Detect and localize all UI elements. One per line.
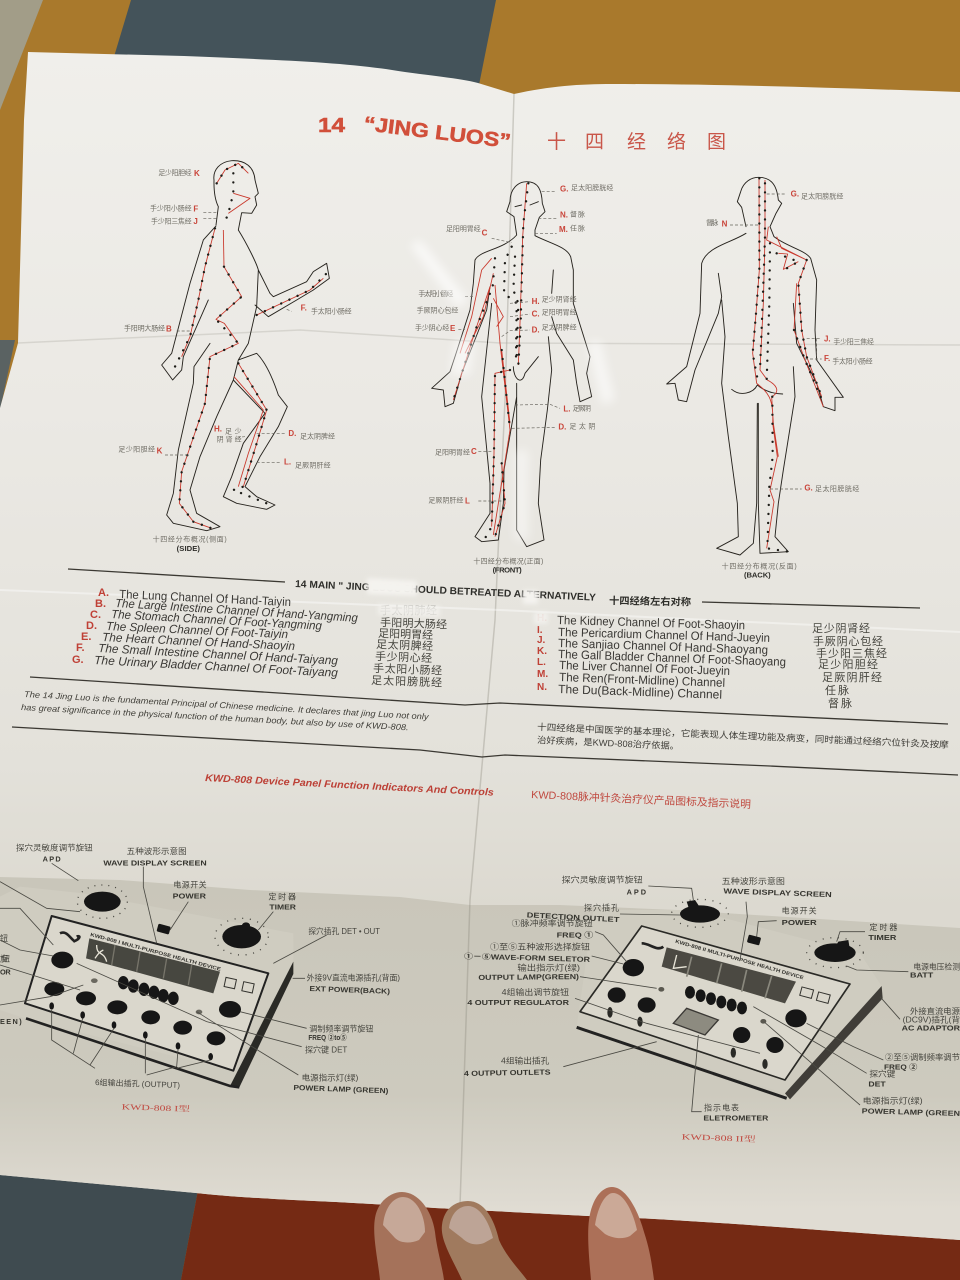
labels: side: F — [193, 205, 198, 214]
labels: back: F. — [824, 354, 830, 363]
device II labels: 4组输出插孔 — [501, 1055, 549, 1065]
body outline: back — [667, 177, 843, 555]
labels: front: 足阳明胃经 — [446, 224, 481, 233]
channel list left: E. — [81, 631, 91, 643]
device I labels: 6组输出插孔 (OUTPUT) — [95, 1077, 181, 1090]
title: “JING LUOS” — [362, 113, 512, 153]
device II labels: ②至⑤调制频率调节 — [885, 1052, 960, 1062]
device I labels: EXT POWER(BACK) — [309, 984, 391, 996]
figure: side view — [118, 161, 352, 553]
channels: front — [453, 183, 527, 537]
channel list left: A. — [98, 587, 109, 599]
device I caption: KWD-808 I型 — [122, 1101, 190, 1114]
device II labels: 4 OUTPUT OUTLETS — [464, 1067, 551, 1078]
device II labels: FREQ ① — [557, 930, 594, 939]
channel list left — [72, 587, 359, 680]
channel list right: J. — [537, 635, 546, 646]
labels: side — [118, 168, 352, 553]
labels: side: F. — [301, 304, 307, 313]
english description: The 14 Jing Luo is the fundamental Principal of Chinese medicine. It declares that jing Luo not only — [24, 689, 430, 722]
heading rule and channel list heading: 十四经络左右对称 — [609, 594, 691, 608]
device I body: KWD-808 I MULTI-PURPOSE HEALTH DEVICE — [89, 932, 222, 973]
channel list left chinese: 手阳明大肠经 — [380, 615, 447, 631]
device I labels: TIMER — [269, 902, 297, 911]
section heading chinese: KWD-808脉冲针灸治疗仪产品图标及指示说明 — [531, 788, 751, 811]
channel list left: The Small Intestine Channel Of Hand-Taiyang — [98, 641, 339, 668]
labels: front: C. — [532, 310, 540, 319]
device II labels: POWER — [782, 918, 818, 927]
title: 14 — [318, 115, 346, 137]
labels: front: N. — [560, 211, 568, 220]
labels: side: (SIDE) — [177, 544, 200, 553]
labels: front: C — [471, 447, 477, 456]
channels: side — [179, 163, 323, 528]
labels: side: 足少阳胆经 — [118, 445, 155, 454]
device I labels — [0, 843, 400, 1095]
device II labels: DETECTION OUTLET — [527, 910, 620, 924]
channel list left: The Stomach Channel Of Foot-Yangming — [111, 607, 323, 633]
body details: back — [732, 385, 783, 394]
channel list left: The Lung Channel Of Hand-Taiyin — [119, 587, 291, 609]
channel list right: H. — [537, 613, 547, 624]
labels: back: 足太阳膀胱经 — [815, 484, 859, 493]
labels: front: D. — [532, 325, 540, 334]
labels: front: G. — [560, 185, 568, 194]
labels: front: L. — [563, 405, 570, 414]
device II labels: 电源电压检测 — [913, 961, 960, 971]
body outline: front — [432, 182, 592, 547]
english description — [21, 689, 430, 732]
labels: back: J. — [824, 335, 831, 344]
device II labels: 外接直流电源 — [910, 1006, 960, 1016]
channel list right: The Du(Back-Midline) Channel — [558, 682, 722, 702]
labels: front: 手少阴心经 — [415, 323, 449, 332]
labels: front: 任脉 — [570, 224, 585, 233]
device II labels: BATT — [910, 970, 934, 979]
labels: back: G. — [804, 484, 813, 493]
chinese description: 治好疾病，是KWD-808治疗依据。 — [537, 734, 679, 751]
channel list right: The Sanjiao Channel Of Hand-Shaoyang — [558, 636, 768, 657]
labels: back: 足太阳膀胱经 — [801, 191, 843, 200]
labels: front: 足厥阴 — [573, 404, 591, 413]
fingernail right — [595, 1193, 637, 1238]
device I labels: APD — [43, 854, 61, 863]
labels: back: 督脉 — [706, 218, 718, 227]
device II labels: 探穴插孔 — [584, 903, 619, 913]
device II labels: 4组输出调节旋钮 — [502, 987, 569, 997]
channel list right: M. — [537, 669, 548, 680]
channel list right: The Pericardium Channel Of Hand-Jueyin — [558, 625, 770, 645]
labels: back: 手少阳三焦经 — [833, 337, 874, 346]
labels: side: B — [166, 325, 172, 334]
channel list right chinese: 手少阳三焦经 — [816, 646, 887, 660]
labels: front: 十四经分布概况(正面) — [473, 556, 543, 565]
channel list left chinese — [371, 603, 447, 689]
channel list right: K. — [537, 646, 547, 657]
channel list left: The Urinary Bladder Channel Of Foot-Taiyang — [94, 653, 339, 680]
device II labels: 探穴灵敏度调节旋钮 — [562, 874, 643, 884]
labels: front: 足太阴 — [569, 421, 595, 430]
channel list right — [537, 613, 786, 702]
device I labels: 五种波形示意图 — [127, 846, 187, 856]
labels: side: 足少阳胆经 — [158, 168, 192, 177]
channel list right chinese: 足少阴肾经 — [812, 622, 870, 635]
device I labels: 电源指示灯(绿) — [302, 1073, 359, 1083]
channel list left: G. — [72, 654, 84, 666]
channel list right: The Liver Channel Of Foot-Jueyin — [559, 658, 730, 678]
channel list right: N. — [537, 682, 547, 693]
fingernail middle — [449, 1206, 493, 1244]
chinese description: 十四经络是中国医学的基本理论，它能表现人体生理功能及病变，同时能通过经络穴位针灸及按摩 — [537, 721, 949, 750]
figure: back view — [667, 177, 874, 579]
channel list left chinese: 手少阴心经 — [375, 649, 432, 665]
title — [318, 113, 726, 153]
labels: front: 足阳明胃经 — [542, 307, 577, 316]
device II labels: 定时器 — [869, 922, 897, 932]
device II labels: ①至⑤五种波形选择旋钮 — [490, 941, 590, 951]
device I labels: 钮 — [0, 933, 8, 943]
labels: front: 足太阴脾经 — [542, 322, 577, 331]
lower shaded band behind the devices — [0, 877, 960, 1240]
labels: front: 手厥阴心包经 — [417, 306, 458, 315]
figure: front view — [415, 182, 613, 574]
device II labels: POWER LAMP (GREEN — [862, 1106, 960, 1118]
device II labels: 指示电表 — [704, 1103, 739, 1113]
device II labels: FREQ ② — [884, 1062, 918, 1071]
labels: side: 足少 — [225, 427, 242, 435]
channel list right chinese: 足少阳胆经 — [818, 658, 878, 671]
light glare streaks — [410, 240, 615, 540]
device II labels: 4 OUTPUT REGULATOR — [467, 998, 570, 1007]
labels: back: G. — [791, 190, 799, 199]
channel list right: L. — [537, 657, 546, 668]
channel list right chinese: 督脉 — [828, 696, 852, 710]
device II labels: 电源开关 — [782, 905, 817, 915]
labels: front: 足少阴肾经 — [542, 295, 577, 304]
channel list right chinese: 任脉 — [825, 683, 849, 697]
labels: side: K — [157, 446, 163, 455]
channel list left: F. — [76, 642, 85, 654]
labels: front: M. — [559, 225, 568, 234]
finger left — [374, 1192, 444, 1280]
device II labels: 五种波形示意图 — [722, 876, 785, 886]
device II labels: WAVE DISPLAY SCREEN — [723, 886, 832, 899]
device II labels: DET — [868, 1080, 886, 1089]
labels: side: J — [193, 217, 198, 226]
device II labels: 探穴键 — [869, 1069, 895, 1079]
labels: side: 手太阳小肠经 — [311, 306, 352, 315]
glare over heading text — [367, 578, 548, 624]
device II labels: TIMER — [868, 933, 897, 942]
device I labels: 探穴插孔 DET • OUT — [308, 926, 380, 936]
labels: front: 足太阳膀胱经 — [571, 183, 613, 192]
device I labels: 定时器 — [268, 891, 296, 901]
acupoints: side — [173, 163, 327, 528]
device I body — [0, 885, 293, 1087]
labels: side: K — [194, 169, 200, 178]
device I labels: 外接9V直流电源插孔(背面) — [307, 973, 400, 983]
device II labels: 电源指示灯(绿) — [863, 1095, 923, 1105]
device I labels: 电源开关 — [173, 879, 207, 889]
device I labels: POWER LAMP (GREEN) — [293, 1083, 389, 1095]
channel list left: The Heart Channel Of Hand-Shaoyin — [102, 630, 296, 653]
labels: side: 十四经分布概况(侧面) — [153, 535, 227, 544]
channel list right: I. — [537, 625, 543, 636]
body details: front — [513, 202, 553, 380]
channel list right chinese: 足厥阴肝经 — [822, 671, 882, 684]
device II labels: (DC9V)插孔(背 — [903, 1015, 960, 1025]
channel list left: B. — [95, 598, 106, 610]
channel list right chinese — [812, 622, 887, 710]
device I diagram — [0, 843, 400, 1114]
channel list left: The Spleen Channel Of Foot-Taiyin — [106, 619, 289, 641]
body outline: side — [162, 161, 329, 531]
acupoints: back — [753, 178, 823, 552]
labels: side: 手少阳三焦经 — [151, 216, 192, 225]
labels: back: 手太阳小肠经 — [832, 356, 873, 365]
labels: side: 足太阴脾经 — [300, 431, 335, 440]
device I labels: OR — [0, 968, 11, 977]
labels: front: E — [450, 324, 456, 333]
device II labels: APD — [627, 887, 646, 896]
device I labels: EEN) — [0, 1017, 22, 1026]
labels: side: 足厥阴肝经 — [295, 460, 331, 469]
channel list right: The Gall Bladder Channel Of Foot-Shaoyang — [558, 647, 786, 669]
labels: back: N — [722, 220, 728, 229]
labels: front — [415, 183, 613, 574]
device II labels: ELETROMETER — [703, 1114, 769, 1123]
labels: side: 手少阳小肠经 — [150, 204, 192, 213]
device II labels: ①－⑤WAVE-FORM SELETOR — [464, 952, 591, 964]
labels: front: C — [482, 229, 488, 238]
device II labels: OUTPUT LAMP(GREEN) — [478, 972, 580, 982]
labels: front: 足阳明胃经 — [435, 447, 470, 456]
finger middle — [442, 1201, 527, 1280]
device II body — [577, 899, 883, 1099]
labels: back — [706, 190, 874, 579]
device I labels: POWER — [173, 891, 207, 900]
fingernail left — [383, 1197, 425, 1242]
labels: back: 十四经分布概况(反面) — [722, 561, 797, 570]
device II diagram — [464, 874, 960, 1144]
device I labels: FREQ ②to⑤ — [308, 1033, 347, 1042]
labels: front: D. — [558, 422, 566, 431]
channel list left: D. — [86, 620, 97, 632]
labels: front: L — [465, 496, 470, 505]
labels: side: D. — [288, 429, 296, 438]
section divider rules — [12, 677, 958, 775]
channel list left: C. — [90, 609, 101, 621]
acupoints: front — [453, 183, 528, 538]
channel list left chinese: 足太阳膀胱经 — [371, 673, 442, 689]
channel list right chinese: 手厥阴心包经 — [813, 634, 883, 648]
channel list left chinese: 足阳明胃经 — [378, 627, 433, 642]
channel list right: The Kidney Channel Of Foot-Shaoyin — [557, 613, 745, 632]
device II labels: AC ADAPTOR — [902, 1024, 960, 1033]
title: 十四经络图 — [547, 131, 726, 153]
labels: side: 手阳明大肠经 — [124, 324, 165, 333]
device I labels: 调制频率调节旋钮 — [309, 1023, 373, 1033]
labels: side: H. — [214, 425, 222, 434]
heading rule and channel list heading: 14 MAIN " JING LUOS SHOULD BETREATED ALTERNATIVELY — [295, 579, 596, 604]
channel list left chinese: 足太阴脾经 — [376, 637, 433, 653]
device II labels — [464, 874, 960, 1123]
labels: side: L. — [284, 457, 291, 466]
channel list left: The Large Intestine Channel Of Hand-Yangming — [115, 596, 359, 625]
finger right — [588, 1187, 654, 1280]
device I labels: 探穴灵敏度调节旋钮 — [16, 843, 93, 853]
channel list left chinese: 手太阳小肠经 — [373, 661, 442, 677]
channel list right: The Ren(Front-Midline) Channel — [559, 670, 725, 690]
device I labels: WAVE DISPLAY SCREEN — [103, 858, 207, 867]
device I labels: 旋钮 — [0, 954, 10, 964]
device I leader lines — [0, 863, 327, 1075]
labels: front: H. — [532, 297, 540, 306]
device II body: KWD-808 II MULTI-PURPOSE HEALTH DEVICE — [674, 939, 805, 982]
device II leader lines — [563, 886, 908, 1112]
labels: front: (FRONT) — [493, 565, 522, 574]
device II labels: 输出指示灯(绿) — [517, 963, 580, 973]
device II caption: KWD-808 II型 — [682, 1131, 756, 1144]
labels: front: 足厥阴肝经 — [428, 496, 463, 505]
device II labels: ①脉冲频率调节旋钮 — [512, 918, 593, 928]
labels: front: 督脉 — [570, 210, 585, 219]
section heading english: KWD-808 Device Panel Function Indicators And Controls — [205, 773, 494, 799]
channels: back — [753, 178, 823, 548]
english description: has great significance in the physical function of the human body, but also by use of KWD-808. — [21, 702, 409, 732]
device I labels: 探穴键 DET — [305, 1045, 347, 1055]
labels: side: 阴肾经 — [217, 435, 242, 444]
labels: front: 手太阳小肠经 — [418, 289, 453, 298]
channel list left chinese: 手太阴肺经 — [380, 603, 437, 617]
labels: back: (BACK) — [744, 570, 771, 579]
heading rule and channel list heading — [68, 569, 920, 608]
